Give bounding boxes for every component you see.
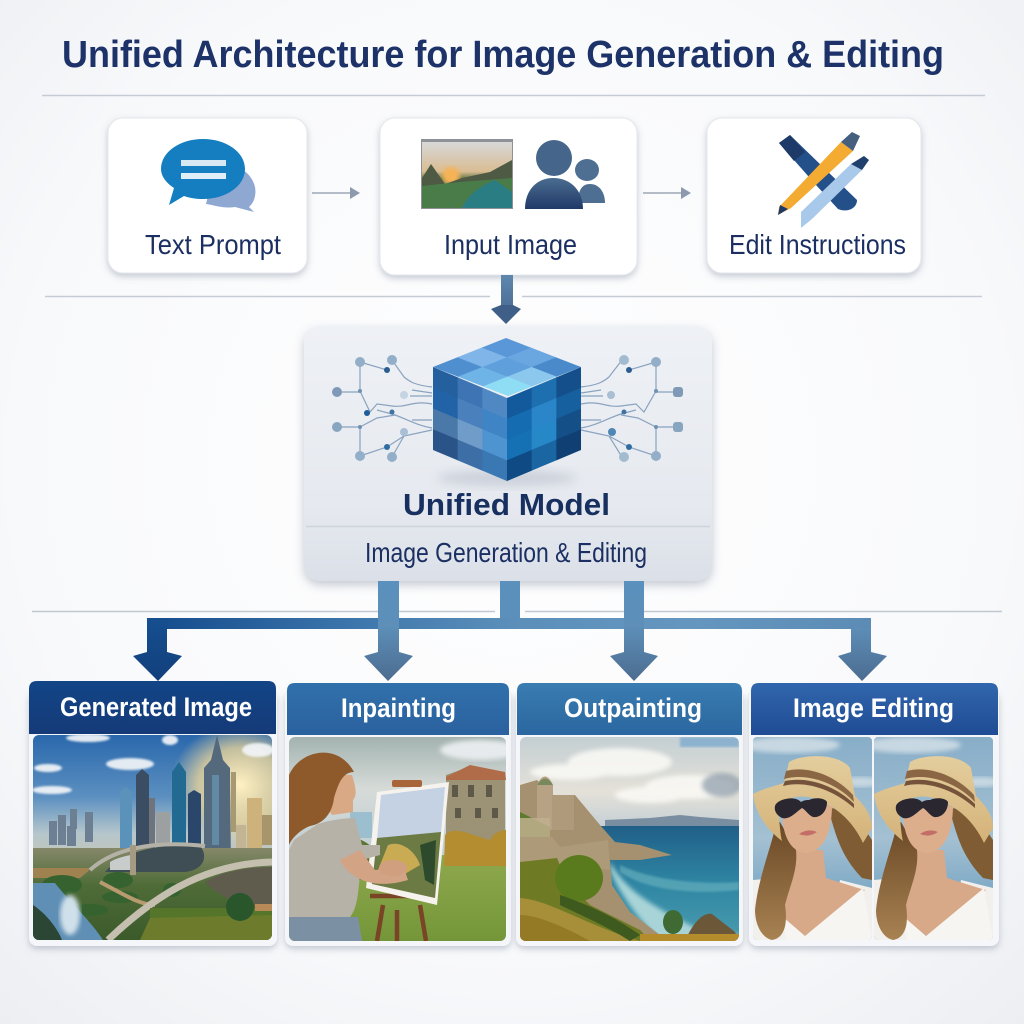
panel: inpainting	[285, 683, 520, 946]
label: input image: Input Image	[444, 229, 577, 260]
icon: cube	[433, 338, 581, 486]
arrow: prompt to image	[312, 187, 360, 199]
header: image editing: Image Editing	[793, 693, 954, 723]
panel: generated image	[29, 681, 310, 946]
image: woman painting	[289, 737, 520, 941]
header: image editing	[751, 683, 998, 735]
image: portrait before	[753, 737, 872, 940]
panel: input image	[380, 118, 637, 275]
subheading: image generation and editing: Image Generation & Editing	[365, 537, 647, 568]
image: portrait after	[874, 737, 993, 940]
header: outpainting	[517, 683, 742, 735]
label: edit instructions: Edit Instructions	[729, 229, 906, 260]
icon: people	[525, 140, 605, 209]
panel: text prompt	[108, 118, 307, 273]
header: generated image	[29, 681, 276, 734]
title: Unified Architecture for Image Generation & Editing	[62, 34, 944, 76]
image: coastal castle	[520, 737, 742, 941]
label: text prompt: Text Prompt	[145, 229, 281, 260]
icon: pencils and marker	[778, 132, 869, 228]
arrow: inputs to model	[491, 275, 521, 324]
icon: landscape thumbnail	[421, 139, 513, 209]
panel: image editing	[740, 683, 1001, 946]
image: futuristic city	[33, 735, 272, 940]
heading: unified model: Unified Model	[403, 487, 610, 522]
icon: neural network links	[332, 355, 683, 462]
panel: edit instructions	[707, 118, 921, 273]
icon: speech bubbles	[161, 139, 255, 212]
arrow: image to edit	[643, 187, 691, 199]
panel: outpainting	[516, 683, 743, 946]
header: outpainting: Outpainting	[564, 693, 702, 723]
panel: unified model	[304, 326, 712, 581]
header: inpainting: Inpainting	[341, 693, 456, 723]
header: generated image: Generated Image	[60, 692, 252, 722]
arrows: model to outputs	[133, 581, 887, 681]
header: inpainting	[287, 683, 509, 735]
